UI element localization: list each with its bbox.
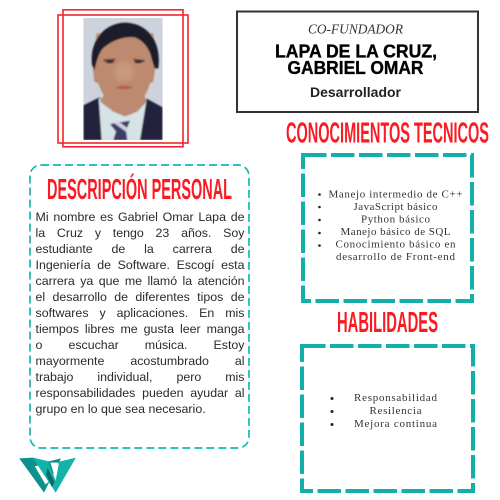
name card — [237, 12, 478, 112]
photo portrait — [83, 18, 163, 140]
panel: conocimientos — [303, 155, 472, 301]
text block: descripcion personal: la Cruz y tengo 23 años. Soy — [36, 226, 244, 240]
abilities list: Resilencia — [370, 405, 422, 417]
role label: CO-FUNDADOR — [308, 22, 404, 36]
panel: descripcion personal — [30, 165, 249, 448]
skills list: desarrollo de Front-end — [336, 251, 456, 263]
abilities list: Responsabilidad — [354, 392, 438, 404]
skills list: Manejo intermedio de C++ — [328, 188, 462, 200]
text block: descripcion personal: tiempos libres me gusta leer manga — [36, 322, 244, 336]
skills list — [318, 188, 462, 263]
icon: W logo — [19, 458, 76, 493]
text block: descripcion personal: responsabilidades pueden ayudar al — [36, 386, 244, 400]
text block: descripcion personal: carrera ya que me llamó la atención — [36, 274, 244, 288]
photo frame: red outlines — [58, 10, 188, 147]
name: GABRIEL OMAR — [288, 58, 424, 78]
text block: descripcion personal: softwares y aplicaciones. En mis — [36, 306, 244, 320]
text block: descripcion personal: grupo en lo que sea necesario. — [36, 402, 206, 416]
skills list: Python básico — [361, 214, 430, 226]
abilities list — [330, 392, 438, 430]
text block: descripcion personal: mayormente acostumbrado al — [36, 354, 244, 368]
text block: descripcion personal: o escuchar música. Estoy — [36, 338, 244, 352]
text block: descripcion personal: el desarrollo de diferentes tipos de — [36, 290, 244, 304]
text block: descripcion personal: estudiante de la carrera de — [36, 242, 244, 256]
job title: Desarrollador — [310, 85, 402, 100]
skills list: JavaScript básico — [354, 201, 438, 213]
name: LAPA DE LA CRUZ, — [275, 42, 437, 62]
name — [275, 42, 437, 78]
text block: descripcion personal: Mi nombre es Gabriel Omar Lapa de — [36, 210, 244, 224]
skills list: Manejo básico de SQL — [340, 226, 451, 238]
panel: habilidades — [302, 346, 473, 491]
text block: descripcion personal: trabajo individual, pero mis — [36, 370, 244, 384]
skills list: Conocimiento básico en — [336, 238, 456, 250]
text: DESCRIPCIÓN PERSONAL — [47, 172, 232, 206]
abilities list: Mejora continua — [354, 418, 437, 430]
text block: descripcion personal — [36, 210, 244, 416]
text block: descripcion personal: Ingeniería de Software. Escogí esta — [36, 258, 244, 272]
